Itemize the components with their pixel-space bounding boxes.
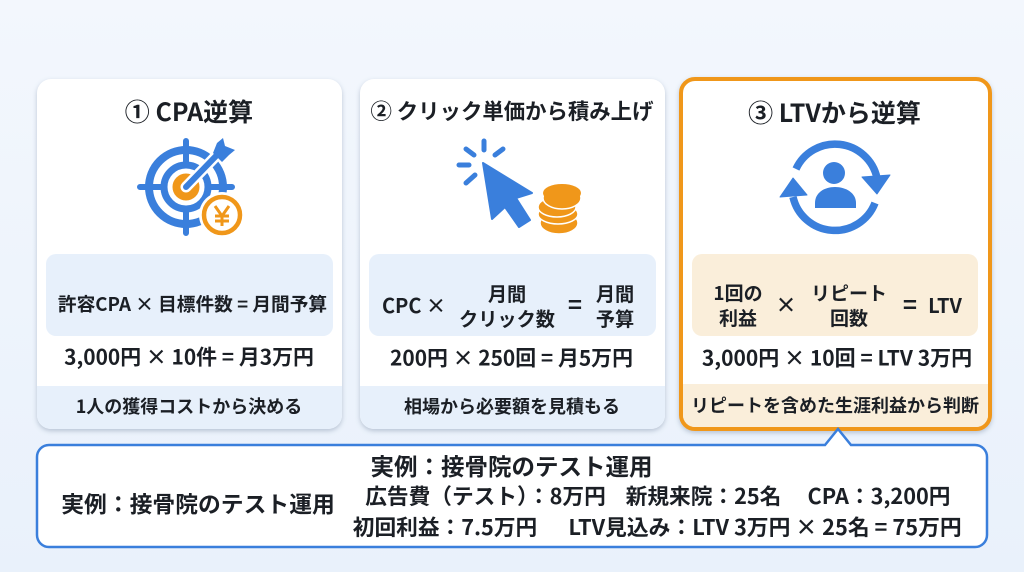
first profit: 初回利益：7.5万円	[353, 511, 537, 542]
formula: equals: =	[568, 286, 582, 321]
example heading: 実例：接骨院のテスト運用	[370, 448, 652, 482]
formula text: 許容CPA × 目標件数 = 月間予算	[58, 290, 327, 317]
formula: repeat count	[811, 278, 887, 330]
footer: summary: リピートを含めた生涯利益から判断	[691, 392, 979, 418]
formula: equals: =	[903, 286, 917, 321]
footer: summary: 相場から必要額を見積もる	[404, 393, 620, 419]
formula: monthly budget: 予算	[596, 304, 634, 332]
footer: summary	[360, 386, 665, 429]
callout: real example	[36, 427, 988, 548]
formula: profit per visit: 1回の	[713, 278, 763, 306]
footer: summary: 1人の獲得コストから決める	[76, 393, 302, 419]
formula: monthly budget	[596, 278, 634, 332]
icon: target with yen coin	[137, 138, 242, 236]
example calculation: 3,000円 × 10回 = LTV 3万円	[702, 342, 972, 372]
formula: LTV: LTV	[928, 290, 962, 319]
callout box with pointer	[36, 427, 988, 548]
new patients: 新規来院：25名	[626, 480, 781, 511]
footer: summary	[683, 384, 988, 427]
heading: LTV: ③ LTVから逆算	[748, 94, 921, 130]
formula: monthly clicks: クリック数	[459, 304, 555, 332]
ad cost: 広告費（テスト）：8万円	[365, 480, 606, 511]
example calculation: 3,000円 × 10件 = 月3万円	[64, 341, 314, 371]
formula: monthly budget: 月間	[596, 278, 634, 306]
panel: LTV reverse calculation (highlighted)	[679, 77, 992, 431]
example calculation: 200円 × 250回 = 月5万円	[390, 342, 633, 372]
LTV forecast: LTV見込み：LTV 3万円 × 25名 = 75万円	[568, 511, 962, 542]
formula: monthly clicks	[459, 278, 555, 332]
formula panel	[369, 254, 656, 336]
formula: profit per visit: 利益	[719, 304, 757, 330]
formula: repeat count: 回数	[830, 304, 868, 330]
panel: CPA reverse calculation	[37, 79, 342, 429]
example label: 実例：接骨院のテスト運用	[61, 486, 335, 519]
icon: cursor with coins	[456, 138, 581, 234]
formula panel	[46, 254, 333, 336]
formula: times: ×	[776, 289, 796, 319]
formula: repeat count: リピート	[811, 278, 887, 306]
formula panel	[692, 254, 978, 336]
formula: CPC: CPC ×	[382, 290, 446, 319]
heading: click price: ② クリック単価から積み上げ	[371, 95, 653, 126]
heading: CPA: ① CPA逆算	[125, 93, 253, 129]
formula: monthly clicks: 月間	[488, 278, 526, 306]
footer: summary	[37, 386, 342, 429]
panel: build up from click price	[360, 79, 665, 429]
icon: person in repeat arrows	[780, 140, 890, 234]
CPA: CPA：3,200円	[808, 480, 950, 511]
formula: profit per visit	[713, 278, 763, 330]
